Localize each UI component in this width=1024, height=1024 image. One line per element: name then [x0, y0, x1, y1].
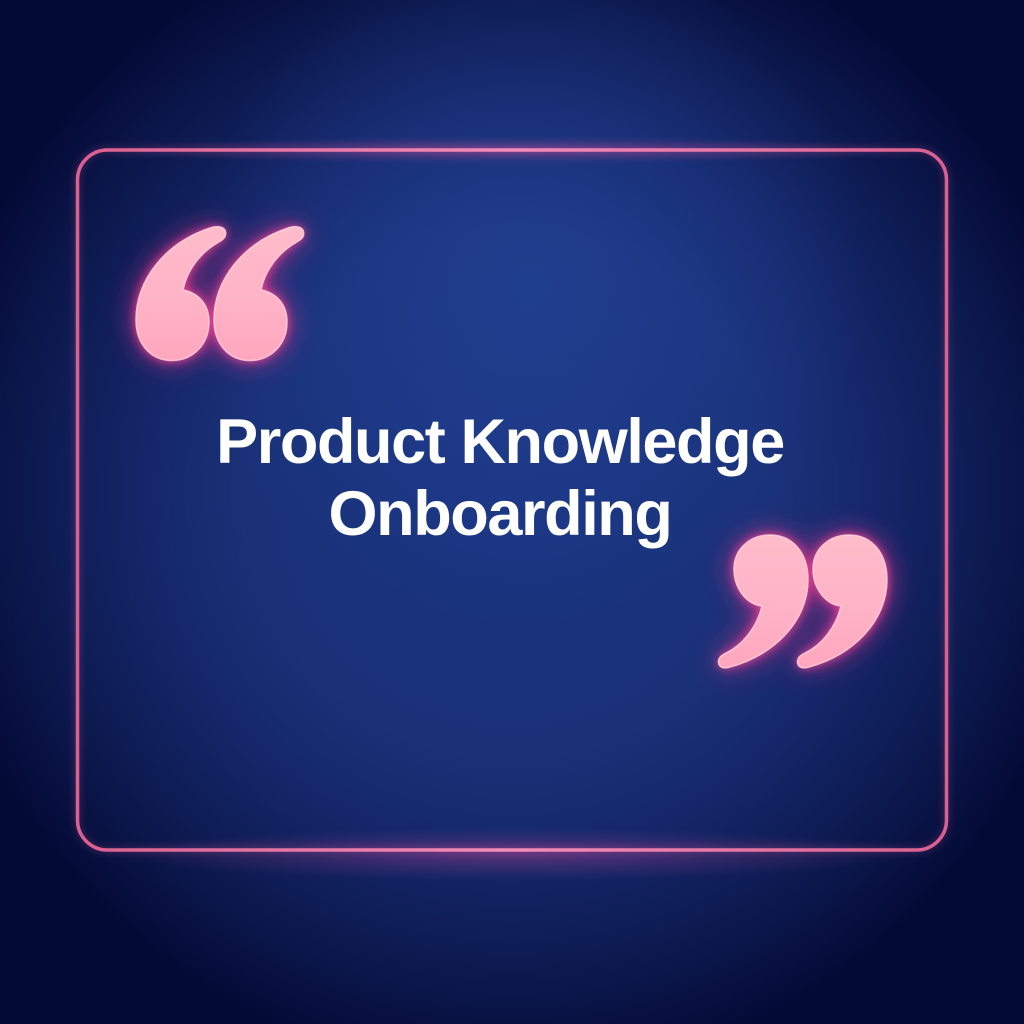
icon: opening quote [136, 227, 304, 360]
title: Onboarding [329, 479, 671, 549]
icon: closing quote [718, 535, 887, 668]
title [216, 407, 784, 549]
title: Product Knowledge [216, 407, 784, 477]
